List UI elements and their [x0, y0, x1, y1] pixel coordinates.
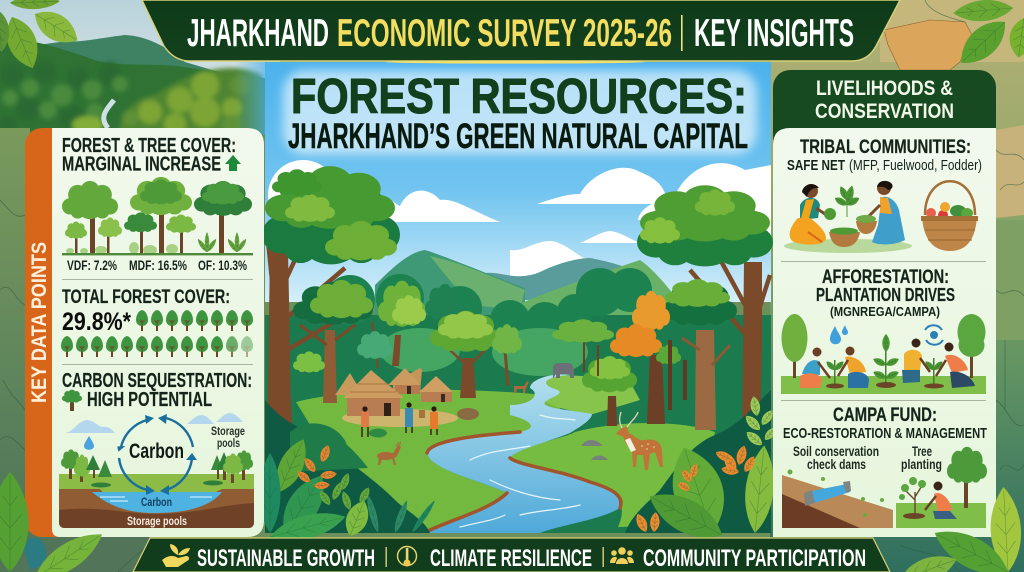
campa captions: Soil conservation — [793, 444, 879, 459]
large vegetable basket — [921, 181, 978, 251]
illustration: tree planting — [896, 447, 987, 528]
afforestation headings: (MGNREGA/CAMPA) — [830, 304, 940, 319]
rocks — [581, 440, 608, 460]
diagram labels: Storage pools — [127, 516, 187, 528]
carbon sequestration heading: CARBON SEQUESTRATION: — [62, 370, 252, 392]
forest density tree illustrations — [62, 177, 253, 255]
high potential text: HIGH POTENTIAL — [87, 389, 212, 411]
decorative leaves: bottom right — [896, 486, 1023, 572]
planters — [800, 338, 975, 388]
carbon cycle arrows — [119, 418, 193, 490]
campa captions: Tree — [912, 444, 932, 459]
woman left — [790, 184, 836, 245]
left trees — [61, 449, 112, 488]
main title: FOREST RESOURCES: — [291, 70, 747, 124]
header banner — [142, 0, 900, 64]
tribal communities heading: TRIBAL COMMUNITIES: — [800, 137, 971, 158]
tree pictogram row two — [61, 336, 253, 357]
baskets with greens — [829, 215, 877, 247]
forest density labels — [67, 258, 247, 273]
main title — [288, 70, 748, 156]
water drop — [84, 436, 94, 450]
header banner: KEY INSIGHTS — [694, 12, 854, 55]
small far deer — [514, 381, 529, 393]
diagram labels: Carbon — [129, 440, 184, 463]
right trees — [552, 185, 773, 440]
community participation label: COMMUNITY PARTICIPATION — [643, 545, 866, 572]
carbon cycle diagram — [59, 413, 254, 528]
tribal communities subtext: (MFP, Fuelwood, Fodder) — [849, 157, 982, 174]
total forest cover value: 29.8%* — [62, 308, 131, 336]
diagram labels — [127, 426, 245, 528]
sustainable growth label: SUSTAINABLE GROWTH — [197, 545, 375, 572]
tribal communities subtext — [787, 157, 982, 174]
panel heading: LIVELIHOODS & — [816, 77, 953, 100]
decorative leaves: top left — [0, 0, 84, 73]
clouds — [268, 160, 771, 278]
sky — [265, 62, 771, 302]
panel: key data points — [25, 128, 264, 537]
forest density labels: MDF: 16.5% — [129, 258, 187, 273]
afforestation headings — [816, 267, 955, 319]
icon: sustainable growth — [162, 544, 190, 567]
icon: tree — [62, 390, 82, 411]
heading: forest and tree cover — [62, 135, 236, 176]
river — [427, 374, 621, 533]
campa fund headings: CAMPA FUND: — [833, 405, 937, 426]
afforestation headings: AFFORESTATION: — [822, 267, 949, 288]
left big tree — [262, 166, 400, 456]
back forest — [265, 315, 771, 533]
campa captions — [793, 444, 942, 472]
panel heading: CONSERVATION — [815, 100, 954, 123]
icon: climate resilience — [398, 546, 416, 566]
diagram labels: pools — [217, 438, 240, 450]
forest density labels: VDF: 7.2% — [67, 258, 117, 273]
total forest cover heading: TOTAL FOREST COVER: — [62, 286, 230, 308]
light sprig — [743, 395, 778, 449]
tree pictogram row one — [136, 310, 253, 331]
green sprigs — [317, 472, 372, 511]
afforestation headings: PLANTATION DRIVES — [816, 285, 955, 305]
panel: livelihoods and conservation — [773, 70, 996, 537]
illustration: soil conservation check dam — [782, 470, 893, 528]
right trees — [203, 450, 253, 486]
mid-left trees — [293, 280, 522, 403]
hills — [470, 258, 640, 300]
climate resilience label: CLIMATE RESILIENCE — [430, 545, 592, 572]
decorative leaves: top right — [952, 0, 1024, 73]
campa fund headings — [783, 405, 987, 442]
central forest scene — [260, 62, 778, 549]
tribal communities subtext: SAFE NET — [787, 157, 845, 174]
water drops — [830, 325, 848, 344]
campa captions: planting — [901, 457, 942, 472]
foreground foliage right — [625, 390, 778, 549]
spotted deer — [616, 412, 663, 470]
main title: JHARKHAND’S GREEN NATURAL CAPITAL — [288, 117, 748, 156]
icon: community — [610, 547, 634, 564]
huts — [335, 368, 453, 416]
centre plant — [833, 185, 861, 217]
forest density labels: OF: 10.3% — [198, 258, 247, 273]
illustration: tribal women gathering produce — [784, 181, 978, 253]
woman right — [868, 181, 905, 244]
recycling icon — [925, 325, 943, 345]
heading: forest and tree cover: MARGINAL INCREASE — [62, 154, 221, 176]
clouds — [66, 413, 243, 433]
meadows — [296, 390, 570, 533]
heading glow — [283, 70, 757, 154]
small seedlings — [825, 358, 944, 388]
decorative leaves: bottom left — [0, 472, 109, 572]
orange sprig — [295, 444, 337, 490]
foreground foliage left — [260, 400, 437, 548]
landscape — [59, 474, 254, 528]
villagers — [361, 402, 479, 438]
panel heading — [815, 77, 954, 123]
diagram labels: Storage — [211, 426, 245, 438]
central seedling — [872, 334, 900, 388]
heading: forest and tree cover: FOREST & TREE COVER: — [62, 135, 236, 157]
illustration: plantation drive — [781, 314, 986, 394]
header banner: JHARKHAND — [187, 12, 329, 55]
header banner: ECONOMIC SURVEY 2025-26 — [337, 12, 672, 55]
trees — [782, 314, 986, 378]
elephant — [553, 363, 574, 378]
diagram labels: Carbon — [141, 497, 172, 509]
panel side label: KEY DATA POINTS — [28, 242, 51, 403]
orange sprigs — [633, 444, 758, 534]
small deer — [377, 442, 401, 465]
footer banner — [133, 538, 890, 572]
icon: green up arrow — [225, 155, 241, 171]
campa captions: check dams — [807, 457, 866, 472]
